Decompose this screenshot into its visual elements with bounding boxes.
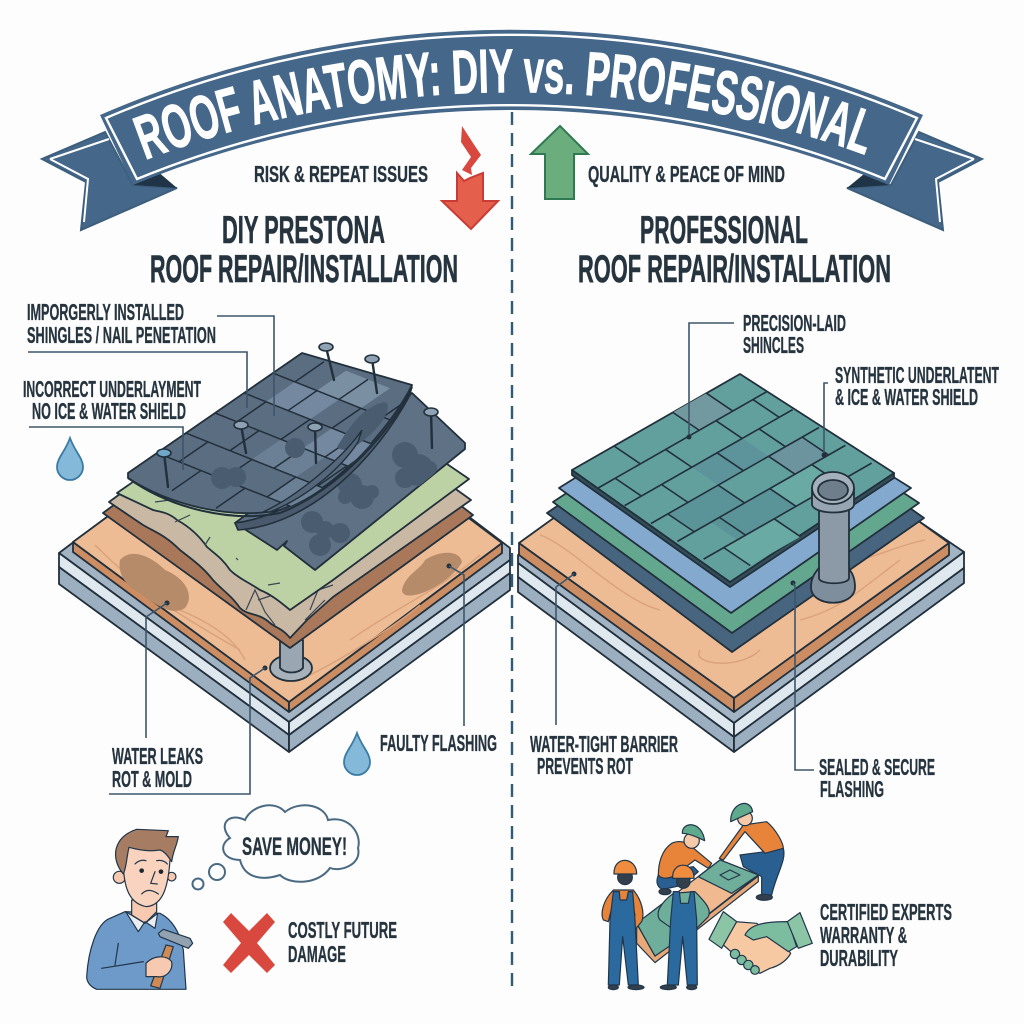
label: costly future damage: DAMAGE (288, 941, 346, 967)
heading: DIY (150, 209, 458, 291)
divider line (511, 112, 513, 988)
icon: water drop (57, 438, 83, 480)
vent pipe (270, 640, 312, 681)
crouching worker (657, 825, 712, 895)
wood sheathing (519, 388, 949, 712)
icon: green up arrow (531, 126, 588, 199)
quality label: QUALITY & PEACE OF MIND (588, 161, 785, 187)
callout: faulty flashing (380, 564, 497, 756)
label: certified experts (820, 899, 952, 971)
callout: water-tight barrier: WATER-TIGHT BARRIER (530, 731, 678, 757)
heading: professional: PROFESSIONAL (640, 209, 808, 252)
callout: improper shingles: IMPORGERLY INSTALLED (27, 299, 184, 325)
icon: lightning and down arrow (442, 126, 498, 229)
callout: underlayment: INCORRECT UNDERLAYMENT (23, 376, 201, 402)
front worker (658, 865, 709, 990)
figure: worried DIY man (87, 829, 193, 989)
figure: professional roofing crew (602, 803, 784, 990)
callout: water-tight barrier (530, 572, 678, 779)
heading: professional (578, 209, 891, 291)
water stains (120, 553, 462, 611)
callout: water-tight barrier: PREVENTS ROT (537, 753, 633, 779)
callout: water leaks: WATER LEAKS (112, 743, 203, 769)
title: ROOF ANATOMY: DIY vs. PROFESSIONAL (132, 49, 868, 160)
callout: sealed flashing: FLASHING (820, 776, 884, 802)
label: costly future damage: COSTLY FUTURE (288, 917, 397, 943)
roof panel (637, 860, 758, 963)
vent pipe (811, 472, 855, 603)
callout: improper shingles: SHINGLES / NAIL PENETATION (27, 322, 216, 348)
title banner (40, 30, 984, 232)
left worker (602, 860, 644, 990)
icon: water drop 2 (344, 733, 370, 775)
callout: underlayment: NO ICE & WATER SHIELD (32, 398, 186, 424)
thought bubble (192, 805, 359, 890)
callout: improper shingles (27, 299, 274, 416)
diagram: professional roof layers (518, 374, 964, 752)
green layer (553, 382, 919, 633)
heading: DIY: DIY PRESTONA (222, 209, 385, 252)
diagram: DIY roof layers (59, 343, 510, 752)
callout: underlayment (23, 376, 201, 470)
wood sheathing (73, 383, 502, 712)
heading: DIY: ROOF REPAIR/INSTALLATION (150, 248, 458, 291)
label: costly future damage (288, 917, 397, 967)
green underlayment (117, 365, 469, 610)
nails (157, 343, 438, 487)
base deck (518, 395, 964, 752)
blue layer (559, 378, 911, 613)
teal shingles (572, 374, 898, 587)
risk label: RISK & REPEAT ISSUES (254, 161, 428, 187)
right worker (719, 803, 784, 900)
callout: precision shingles: PRECISION-LAID (743, 310, 846, 336)
brown layer (103, 375, 473, 648)
dark blue layer (547, 385, 924, 652)
callout: faulty flashing: FAULTY FLASHING (380, 730, 497, 756)
callout: precision shingles (686, 310, 846, 440)
label: certified experts: WARRANTY & (820, 922, 907, 948)
callout: synthetic underlayment (822, 362, 999, 458)
label: certified experts: DURABILITY (820, 945, 898, 971)
icon: red X (223, 913, 275, 973)
base deck (59, 380, 510, 752)
callout: water leaks: ROT & MOLD (112, 766, 192, 792)
callout: water leaks (109, 600, 268, 794)
upper shingle sheet (127, 352, 413, 518)
icon: handshake (709, 912, 812, 974)
tan layer (109, 370, 471, 638)
thought bubble: SAVE MONEY! (242, 833, 347, 861)
lower shingle sheet (235, 385, 465, 570)
callout: precision shingles: SHINCLES (743, 332, 804, 358)
callout: sealed flashing (790, 580, 935, 802)
